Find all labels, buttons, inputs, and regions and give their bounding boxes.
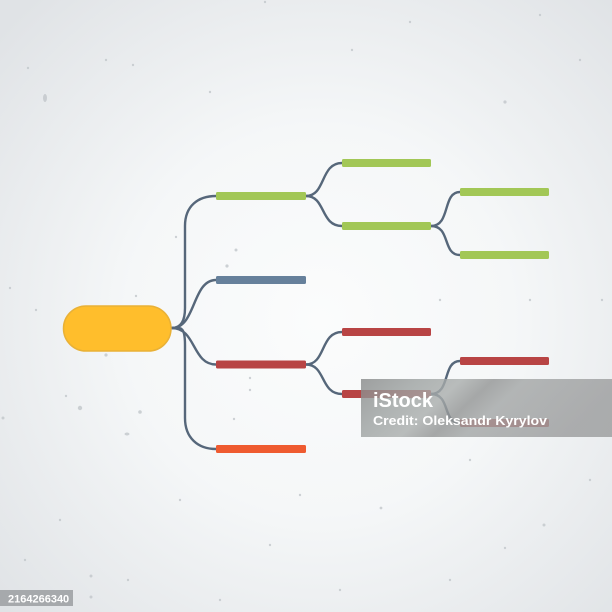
red leaf bottom [460,419,549,427]
orange branch node [216,445,306,453]
central node [64,306,171,351]
blue branch node [216,276,306,284]
green sub-node top [342,159,431,167]
image id number: 2164266340 [8,594,69,606]
green sub-node bottom [342,222,431,230]
green leaf bottom [460,251,549,259]
red sub-node bottom [342,390,431,398]
red leaf top [460,357,549,365]
watermark credit: Credit: Oleksandr Kyrylov [373,413,548,428]
red sub-node top [342,328,431,336]
image id tag [0,590,73,606]
watermark band [361,379,612,437]
connector lines [172,163,460,449]
red branch node [216,360,306,368]
green leaf top [460,188,549,196]
watermark brand: iStock [373,390,434,412]
green branch node [216,192,306,200]
